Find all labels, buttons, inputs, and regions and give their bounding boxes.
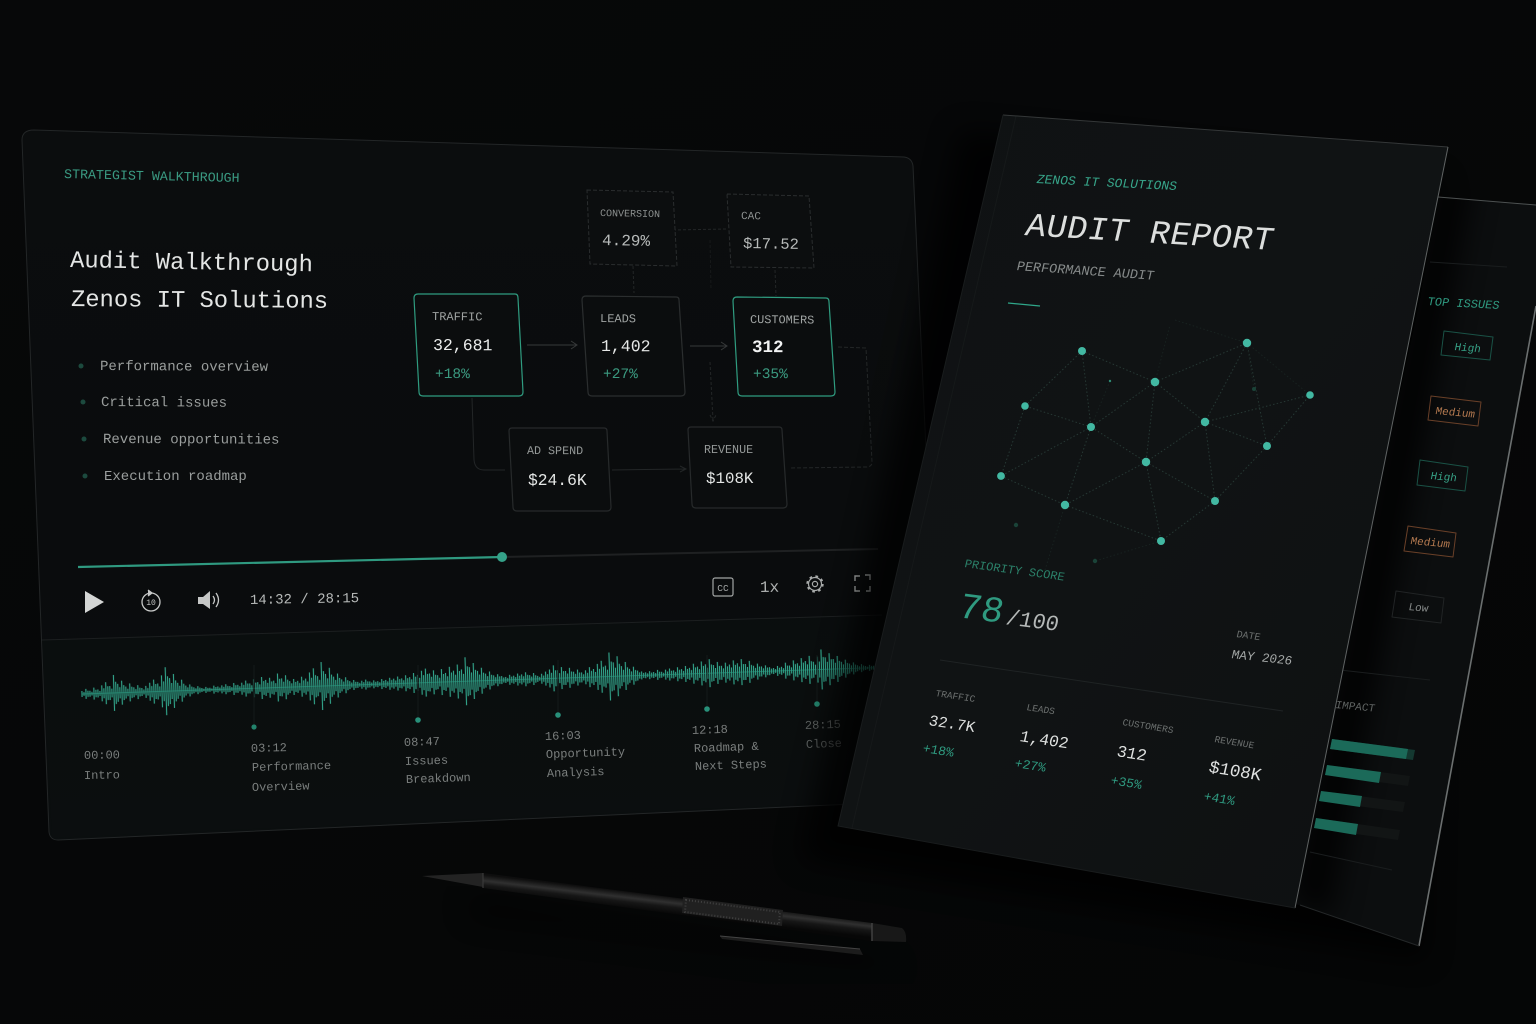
badge: high: High [1429,471,1458,485]
heading: audit walkthrough [70,248,328,316]
report shadow [800,130,1440,960]
icon: rewind 10: 10 [146,599,156,608]
metric: customers: 312 [1115,742,1149,766]
node: leads: +27% [603,367,638,383]
chapter: roadmap and next steps: Roadmap & [694,740,759,756]
icon: play [85,591,104,613]
funnel connectors and arrows [472,229,872,472]
bullet list [78,359,279,485]
impact bars [1314,739,1415,840]
node: cac: $17.52 [743,235,799,254]
chapter: close: 28:15 [805,718,841,733]
eyebrow: strategist walkthrough: STRATEGIST WALKTHROUGH [64,167,240,186]
chapter: performance overview: Performance [252,759,331,775]
chapter: opportunity analysis: Opportunity [546,745,625,762]
metric: traffic [921,688,978,761]
playback time: 14:32 / 28:15 [250,591,359,609]
priority score value [954,588,1061,638]
metric: revenue: +41% [1202,789,1237,809]
node: ad spend [509,428,611,511]
icon: volume [198,591,218,609]
title: audit report: AUDIT REPORT [1022,209,1278,261]
heading: audit walkthrough: Zenos IT Solutions [71,287,328,316]
bullet list: Revenue opportunities [103,432,279,449]
panel: back page of report [1290,140,1536,946]
node: conversion [587,190,677,266]
heading: impact: IMPACT [1334,700,1376,716]
metric: revenue: REVENUE [1213,734,1256,751]
chapter: issues breakdown: Issues [405,754,448,769]
bullet list: Critical issues [101,395,227,412]
node: customers: 312 [752,338,784,358]
node: ad spend: $24.6K [528,471,587,490]
badge: low [1392,591,1444,623]
date [1230,629,1294,669]
metric: leads: +27% [1013,756,1048,776]
metric: traffic: +18% [921,741,956,761]
metric: revenue: $108K [1207,758,1264,786]
timeline markers [251,655,820,730]
node: leads: 1,402 [601,337,651,356]
node: customers: +35% [753,367,788,383]
chapter: roadmap and next steps: Next Steps [695,757,767,774]
priority score label: PRIORITY SCORE [963,557,1066,584]
chapter: intro: 00:00 [84,748,120,763]
metric: customers [1109,717,1175,793]
metric: customers: CUSTOMERS [1121,717,1175,736]
chapter: opportunity analysis [545,729,625,781]
heading: audit walkthrough: Audit Walkthrough [70,248,313,279]
node: customers [733,297,835,396]
metric: revenue [1202,734,1264,809]
icon: captions: CC [717,583,729,594]
node: revenue: REVENUE [704,443,753,457]
metric: customers: +35% [1109,773,1144,793]
chapter: performance overview: 03:12 [251,741,287,756]
chapter: performance overview: Overview [252,779,310,795]
chapter: opportunity analysis: Analysis [547,765,605,781]
metric: leads [1013,702,1071,776]
badge: low: Low [1407,602,1430,616]
badge: high [1441,331,1493,360]
node: traffic: TRAFFIC [432,310,483,324]
badge: medium: Medium [1409,536,1451,552]
icon: settings gear [807,576,823,592]
node: revenue: $108K [706,470,754,488]
node: leads [582,296,685,396]
node: traffic: 32,681 [433,336,493,355]
date: DATE [1235,629,1262,643]
progress bar [78,549,878,567]
chapter: close [805,718,842,752]
badge: medium [1428,396,1481,426]
badge: high: High [1453,342,1482,356]
node: conversion: 4.29% [602,232,651,251]
icon: fullscreen [855,575,870,591]
pen [422,873,906,970]
node: customers: CUSTOMERS [750,313,814,328]
chapter: roadmap and next steps [692,723,767,774]
panel: video walkthrough tablet [22,130,942,840]
heading: top issues: TOP ISSUES [1426,295,1501,313]
badge: medium [1404,526,1456,557]
metric: traffic: TRAFFIC [934,688,977,705]
audio timeline panel [42,615,902,838]
chapter: opportunity analysis: 16:03 [545,729,581,744]
bullet list: Performance overview [100,359,269,376]
chapter: issues breakdown: Breakdown [406,771,471,787]
node: leads: LEADS [600,312,636,326]
node: ad spend: AD SPEND [527,444,583,458]
node: cac: CAC [741,211,761,223]
chapter: intro: Intro [84,768,120,783]
icon: rewind 10 [142,590,160,611]
date: MAY 2026 [1230,647,1294,669]
network graph [997,320,1314,570]
badge: medium: Medium [1434,406,1476,422]
bullet list: Execution roadmap [104,469,247,485]
divider [940,660,1283,711]
node: traffic: +18% [435,367,470,383]
node: traffic [414,294,523,396]
node: conversion: CONVERSION [600,209,660,221]
accent line [1008,303,1040,306]
priority score value: 78 [954,588,1008,634]
chapter: issues breakdown: 08:47 [404,735,440,750]
chapter: close: Close [806,737,842,752]
node: revenue [688,427,787,508]
badge: high [1417,460,1468,491]
brand: zenos it solutions: ZENOS IT SOLUTIONS [1035,172,1179,194]
node: cac [727,194,814,268]
waveform [81,644,876,718]
metric: traffic: 32.7K [927,712,978,737]
chapter: roadmap and next steps: 12:18 [692,723,728,738]
panel: audit report cover [838,115,1448,908]
playback speed: 1x [760,579,779,597]
metric: leads: 1,402 [1018,727,1071,753]
chapter: issues breakdown [404,735,471,787]
chapter: performance overview [251,741,331,795]
metric: leads: LEADS [1025,702,1056,717]
chapter: intro [84,748,120,783]
icon: captions [713,578,733,596]
subtitle: performance audit: PERFORMANCE AUDIT [1015,260,1155,285]
priority score value: /100 [1003,606,1061,638]
